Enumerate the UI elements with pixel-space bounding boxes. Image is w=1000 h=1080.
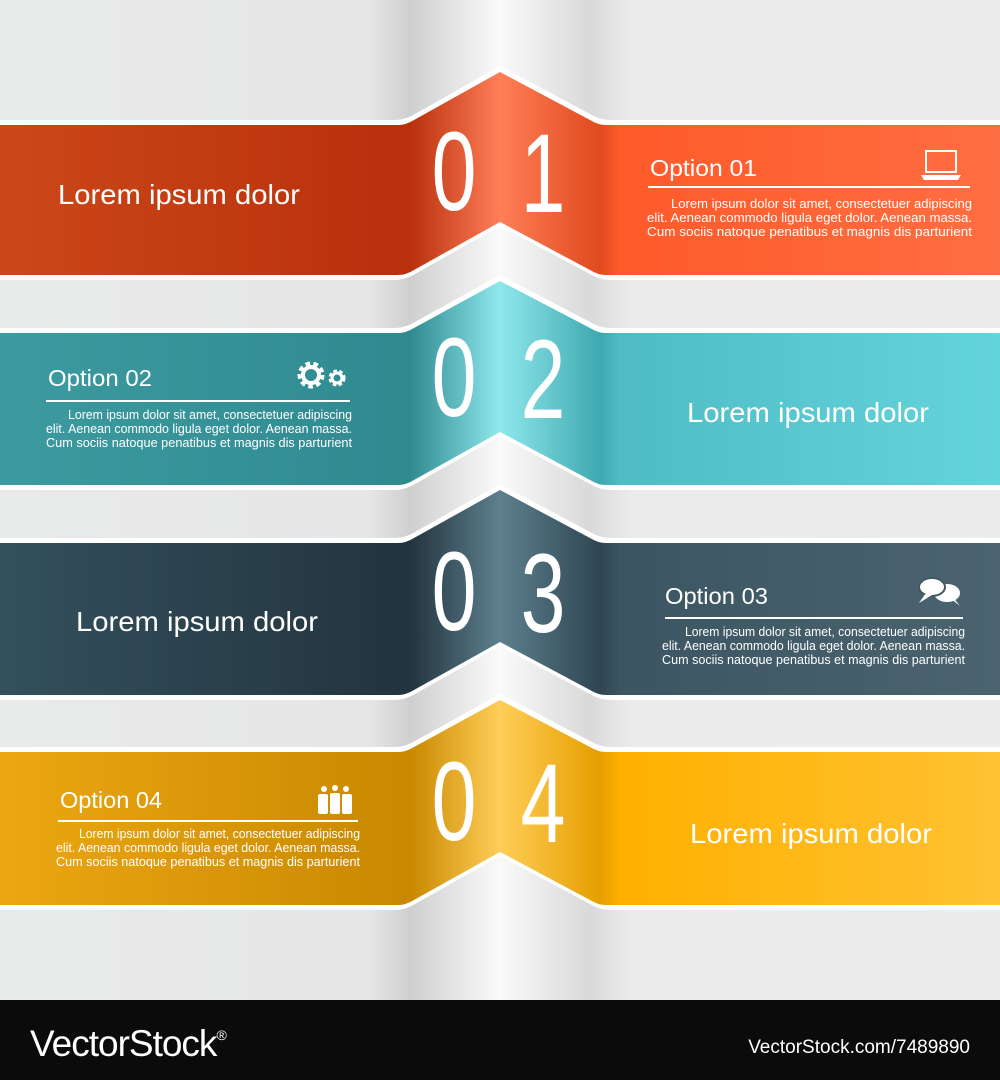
option 03 block: elit. Aenean commodo ligula eget dolor. Aenean massa. <box>662 639 965 653</box>
option 04 block: Cum sociis natoque penatibus et magnis dis parturient <box>56 855 361 869</box>
option 01 block: elit. Aenean commodo ligula eget dolor. Aenean massa. <box>647 211 972 225</box>
option 01 block: Cum sociis natoque penatibus et magnis dis parturient <box>647 225 973 239</box>
option 03 block <box>662 583 966 667</box>
option 02 block: Option 02 <box>48 365 152 391</box>
footer bar <box>0 1000 1000 1080</box>
icon: chat bubbles <box>919 578 960 606</box>
option 01 block: Option 01 <box>650 155 757 181</box>
icon: laptop <box>921 151 961 180</box>
option 03 block: Cum sociis natoque penatibus et magnis dis parturient <box>662 653 966 667</box>
option 04 block <box>56 787 361 869</box>
option 02 block: elit. Aenean commodo ligula eget dolor. Aenean massa. <box>46 422 352 436</box>
number 02 <box>432 315 565 442</box>
footer bar: ® <box>216 1027 227 1043</box>
icon: gears <box>301 365 343 385</box>
ribbon 2 <box>0 275 1000 490</box>
number 03: 3 <box>521 531 565 656</box>
option 04 block: Option 04 <box>60 787 162 813</box>
number 03 <box>432 529 565 656</box>
heading: lorem 2: Lorem ipsum dolor <box>687 397 929 428</box>
ribbon 1 <box>0 66 1000 280</box>
option 03 block: Option 03 <box>665 583 768 609</box>
option 01 block <box>647 155 973 239</box>
number 01: 1 <box>521 111 565 236</box>
number 02: 2 <box>521 317 565 442</box>
option 02 block <box>46 365 353 450</box>
footer bar: VectorStock <box>30 1023 216 1064</box>
number 01 <box>432 109 565 236</box>
number 04: 4 <box>521 741 565 866</box>
option 02 block: Cum sociis natoque penatibus et magnis dis parturient <box>46 436 353 450</box>
ribbon 4 <box>0 694 1000 910</box>
ribbon 3 <box>0 484 1000 700</box>
heading: lorem 3: Lorem ipsum dolor <box>76 606 318 637</box>
option 03 block: Lorem ipsum dolor sit amet, consectetuer adipiscing <box>685 625 965 639</box>
option 04 block: elit. Aenean commodo ligula eget dolor. Aenean massa. <box>56 841 360 855</box>
number 04: 0 <box>432 739 476 864</box>
heading: lorem 4: Lorem ipsum dolor <box>690 818 932 849</box>
heading: lorem 1: Lorem ipsum dolor <box>58 179 300 210</box>
number 02: 0 <box>432 315 476 440</box>
footer bar: VectorStock.com/7489890 <box>748 1037 970 1058</box>
option 01 block: Lorem ipsum dolor sit amet, consectetuer adipiscing <box>671 197 972 211</box>
number 04 <box>432 739 565 866</box>
icon: people <box>318 785 352 814</box>
number 01: 0 <box>432 109 476 234</box>
number 03: 0 <box>432 529 476 654</box>
option 02 block: Lorem ipsum dolor sit amet, consectetuer adipiscing <box>68 408 352 422</box>
option 04 block: Lorem ipsum dolor sit amet, consectetuer adipiscing <box>79 827 360 841</box>
